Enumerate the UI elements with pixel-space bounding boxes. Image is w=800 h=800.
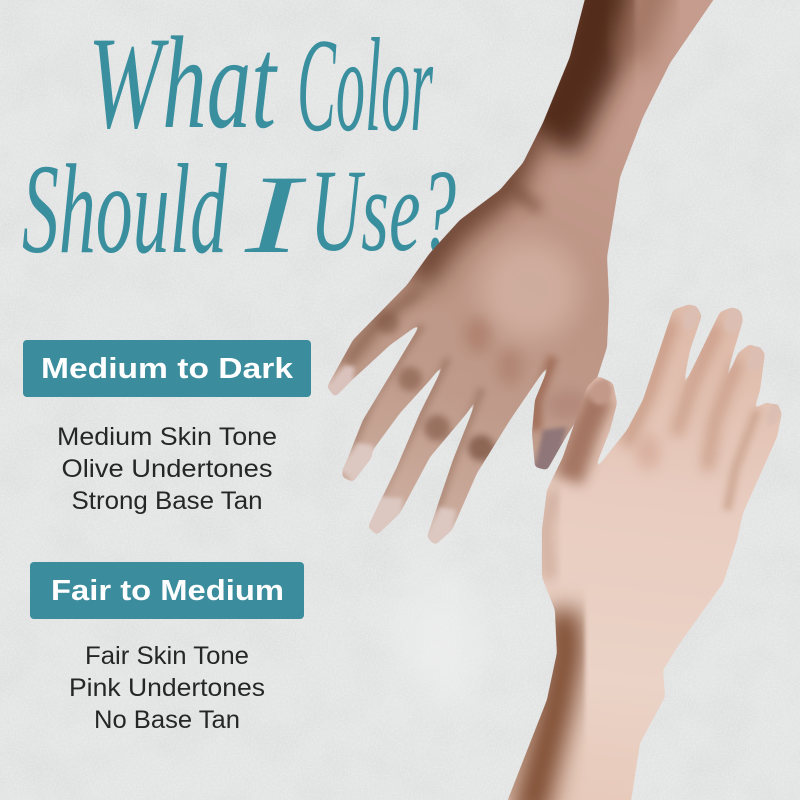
title: What Color Should I Use?: Use? (310, 145, 456, 276)
nail: thumb (535, 427, 567, 470)
text block: medium to dark traits (57, 423, 277, 515)
nail: middle tip (720, 306, 746, 336)
badge: Medium to Dark (23, 340, 311, 397)
text block: fair to medium traits: Pink Undertones (69, 674, 265, 702)
title: What Color Should I Use?: Color (297, 11, 433, 159)
nail: pinky tip (764, 402, 782, 428)
illustration: lighter hand reaching up (500, 303, 782, 800)
title: What Color Should I Use?: I (244, 153, 307, 277)
badge: Fair to Medium: Fair to Medium (51, 575, 284, 607)
text block: medium to dark traits: Olive Undertones (62, 455, 272, 483)
nail: thumb tip (586, 376, 616, 408)
nail: ring (342, 443, 373, 482)
text block: fair to medium traits (69, 642, 265, 734)
text block: fair to medium traits: No Base Tan (94, 706, 240, 734)
title: What Color Should I Use?: What (88, 9, 278, 156)
nail: pinky (327, 365, 355, 397)
title: What Color Should I Use? (22, 9, 456, 280)
nail: middle (368, 497, 403, 535)
badge: Medium to Dark: Medium to Dark (41, 353, 294, 385)
nail: index tip (679, 303, 703, 333)
title: What Color Should I Use?: Should (22, 138, 228, 280)
illustration: darker hand reaching down (327, 0, 727, 545)
text block: fair to medium traits: Fair Skin Tone (85, 642, 249, 670)
nail: ring tip (744, 344, 766, 374)
nail: index (427, 507, 456, 545)
text block: medium to dark traits: Strong Base Tan (72, 487, 262, 515)
text block: medium to dark traits: Medium Skin Tone (57, 423, 277, 451)
badge: Fair to Medium (30, 562, 304, 619)
